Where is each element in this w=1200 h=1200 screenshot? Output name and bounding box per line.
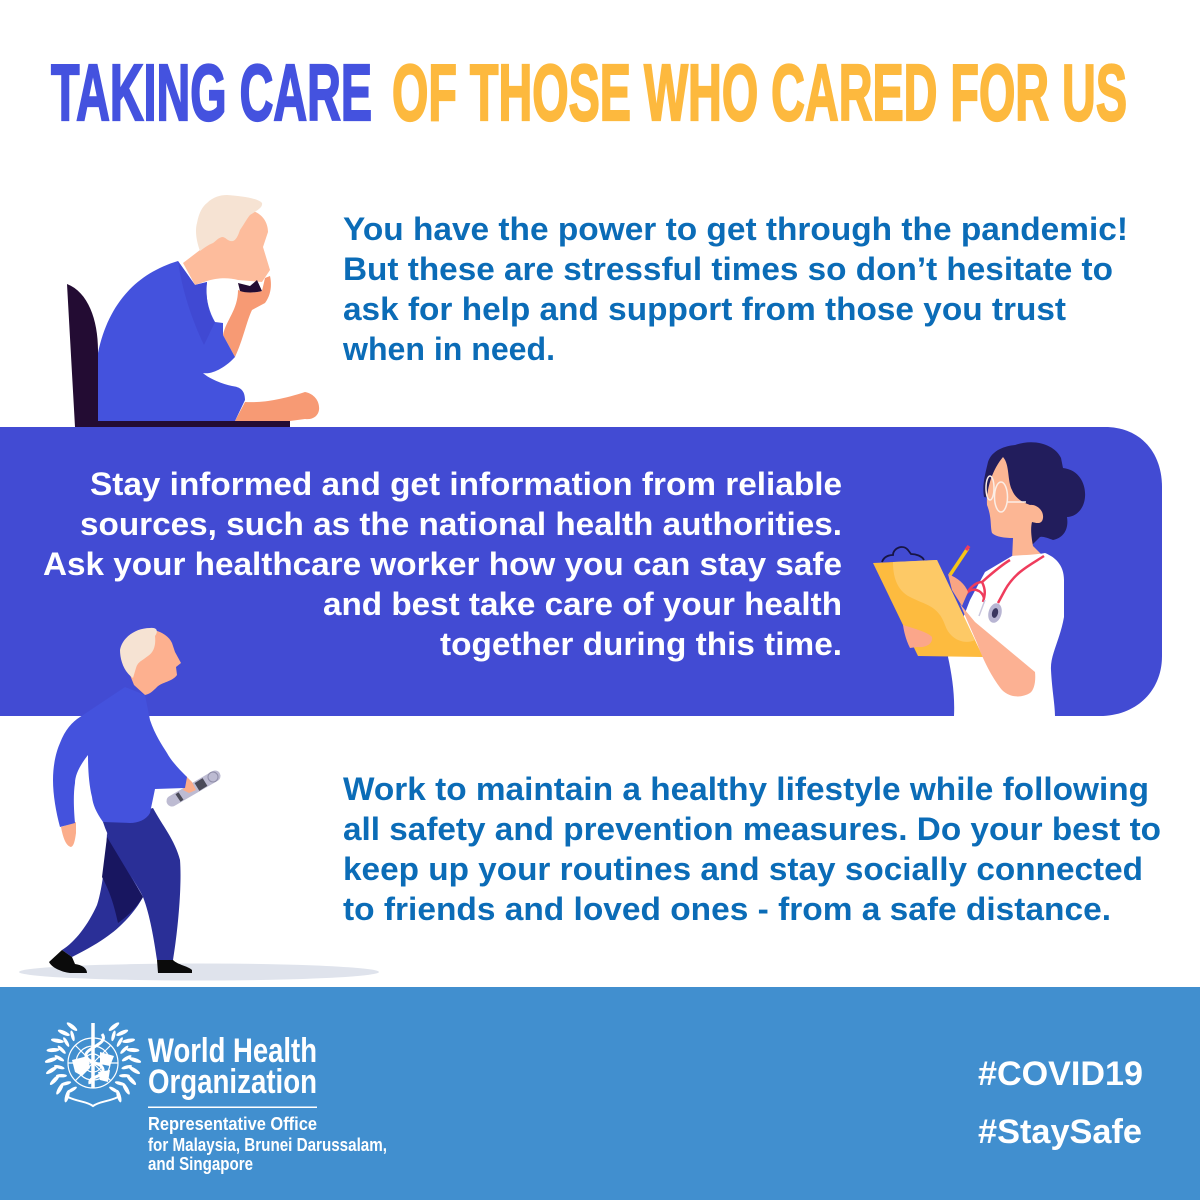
- logo: organization name: World Health: [148, 1032, 317, 1070]
- lower hand: [61, 822, 76, 847]
- text block: stay informed: Stay informed and get information from reliable: [90, 466, 842, 502]
- text block: healthy lifestyle: to friends and loved ones - from a safe distance.: [343, 891, 1111, 927]
- text block: power to get through: You have the power to get through the pandemic!: [343, 211, 1128, 247]
- hair: [983, 442, 1085, 545]
- hair: [196, 195, 262, 251]
- title: [51, 48, 1127, 137]
- text block: stay informed: sources, such as the national health authorities.: [80, 506, 842, 542]
- glasses: [986, 476, 1026, 512]
- logo: WHO emblem: [44, 1021, 142, 1106]
- arm and hand: [223, 276, 271, 357]
- text block: power to get through: ask for help and support from those you trust: [343, 291, 1066, 327]
- logo: organization name: Representative Office: [148, 1114, 317, 1134]
- front leg: [103, 808, 181, 960]
- logo: organization name: and Singapore: [148, 1154, 253, 1174]
- logo: organization name: for Malaysia, Brunei Darussalam,: [148, 1135, 387, 1155]
- wreath: [44, 1021, 142, 1103]
- newspaper: [172, 776, 215, 801]
- text block: power to get through: [342, 211, 1128, 367]
- writing hand: [948, 574, 968, 606]
- upper hand: [183, 776, 196, 793]
- footer band: [0, 987, 1200, 1200]
- face and neck: [987, 457, 1043, 560]
- text block: healthy lifestyle: all safety and prevention measures. Do your best to: [343, 811, 1161, 847]
- text block: stay informed: and best take care of your health: [323, 586, 842, 622]
- head: [124, 630, 181, 695]
- text block: power to get through: But these are stressful times so don’t hesitate to: [343, 251, 1113, 287]
- hashtags: [978, 1055, 1143, 1151]
- text block: stay informed: together during this time.: [440, 626, 842, 662]
- sweater: [53, 687, 187, 827]
- icon: doctor with clipboard: [873, 442, 1085, 716]
- icon: walking elderly man: [49, 628, 218, 973]
- chair: [67, 284, 290, 427]
- text block: power to get through: when in need.: [342, 331, 555, 367]
- clipboard clip: [882, 547, 924, 562]
- hair: [120, 628, 157, 678]
- chest piece: [986, 602, 1004, 624]
- text block: healthy lifestyle: [343, 771, 1161, 927]
- title: TAKING CARE: [51, 48, 372, 137]
- pencil: [950, 548, 968, 575]
- back leg: [62, 833, 143, 957]
- shirt: [98, 261, 245, 421]
- logo: organization name: [148, 1032, 387, 1174]
- coat: [948, 553, 1064, 716]
- icon: seated elderly man: [67, 195, 319, 427]
- hashtags: #StaySafe: [978, 1113, 1142, 1151]
- clipboard: [873, 560, 983, 657]
- globe: [68, 1038, 118, 1088]
- shoes: [49, 950, 87, 973]
- text block: healthy lifestyle: keep up your routines and stay socially connected: [343, 851, 1143, 887]
- text block: stay informed: Ask your healthcare worker how you can stay safe: [43, 546, 842, 582]
- staff and serpent: [86, 1023, 104, 1088]
- panel: stay informed: [0, 427, 1162, 716]
- ground shadow: [19, 964, 379, 980]
- hashtags: #COVID19: [978, 1055, 1143, 1093]
- logo: organization name: Organization: [148, 1063, 317, 1101]
- text block: healthy lifestyle: Work to maintain a healthy lifestyle while following: [343, 771, 1149, 807]
- text block: stay informed: [43, 466, 842, 662]
- neck and head: [183, 211, 270, 285]
- forearm: [960, 604, 1035, 696]
- continents: [72, 1052, 114, 1082]
- forearm on table: [235, 392, 319, 421]
- stethoscope: [965, 556, 1044, 603]
- beard: [238, 280, 262, 292]
- holding hand: [903, 625, 932, 648]
